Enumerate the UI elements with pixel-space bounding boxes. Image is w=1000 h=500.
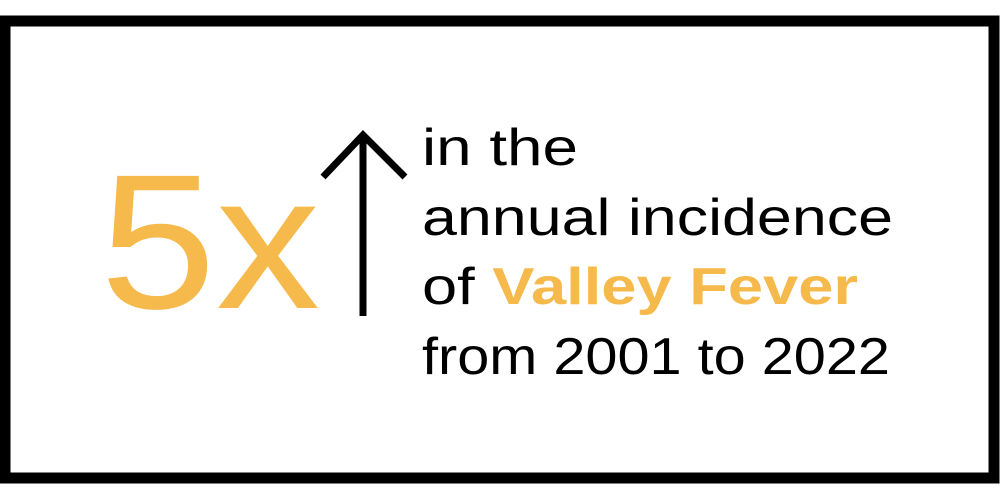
text block: description: of Valley Fever [422, 258, 858, 316]
text block: description: in the [422, 119, 578, 177]
icon: up arrow [323, 135, 405, 316]
text block: description [422, 119, 893, 386]
text block: description: annual incidence [422, 189, 893, 247]
text block: description: from 2001 to 2022 [422, 328, 890, 386]
big number 5x: 5x [100, 134, 320, 349]
